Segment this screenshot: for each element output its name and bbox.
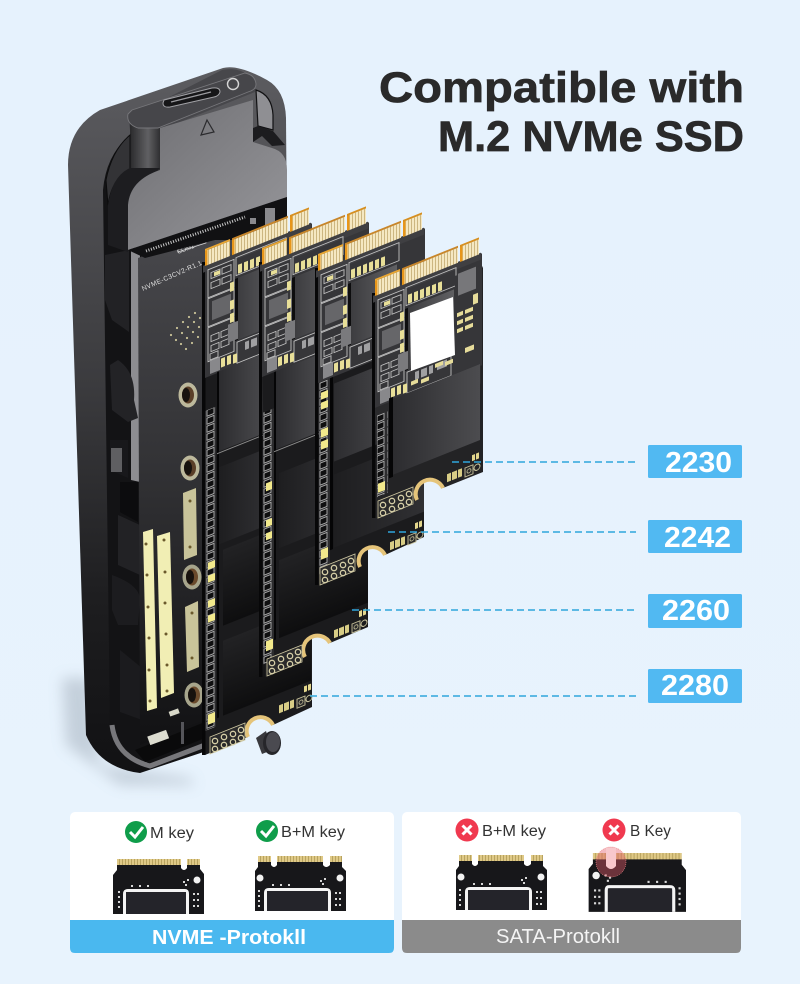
- title: Compatible with: [379, 64, 744, 112]
- M key label: M key: [150, 825, 194, 842]
- B key SSD thumbnail: [589, 853, 686, 912]
- mounting holes: [178, 382, 204, 708]
- SSD 2230 card: [372, 236, 483, 518]
- icon: green check M key: [125, 821, 147, 843]
- board markings: NVME-C3CV2-R1.1: [141, 260, 203, 293]
- top surface of cap: [128, 69, 255, 130]
- size label 2242: [648, 520, 742, 554]
- B+M key label: B+M key: [482, 823, 546, 840]
- label line 2230: [452, 461, 637, 463]
- inner recess: [103, 135, 215, 760]
- cap neck: [130, 122, 160, 174]
- side latch blocks: [105, 250, 146, 720]
- B+M key SSD thumbnail: [456, 855, 547, 910]
- SSD 2260 card: [259, 205, 369, 677]
- SSD 2242 card: [315, 211, 425, 585]
- label line 2260: [352, 609, 636, 611]
- cap pill rim: [128, 73, 256, 128]
- title: M.2 NVMe SSD: [438, 113, 744, 161]
- yellow dot cluster: [170, 312, 201, 350]
- screw: [256, 731, 281, 755]
- size label 2260: 2260: [662, 595, 730, 627]
- size label 2242: 2242: [664, 522, 731, 554]
- label line 2280: [310, 695, 636, 697]
- B+M key label: B+M key: [281, 824, 345, 841]
- size label 2280: [648, 669, 742, 703]
- cap arch: [106, 135, 130, 205]
- icon: red cross B+M key: [456, 818, 478, 842]
- SATA banner text: SATA-Protokll: [496, 926, 620, 948]
- rim highlight: [112, 725, 205, 766]
- triangle mark: [201, 120, 214, 135]
- size label 2260: [648, 594, 742, 628]
- gold contact pads: [143, 488, 199, 711]
- USB-C port: [163, 88, 220, 107]
- enclosure shadow: [62, 678, 195, 785]
- cap right tab: [253, 90, 285, 146]
- board bottom parts: [135, 708, 205, 762]
- board markings: [141, 233, 206, 293]
- panel: SATA protocol: [402, 812, 741, 953]
- cap logo: [228, 78, 238, 90]
- panel: NVMe protocol: [70, 812, 394, 953]
- pink highlight on B key notch: [596, 847, 626, 877]
- size label 2280: 2280: [661, 670, 729, 702]
- board markings: COM1: [176, 243, 196, 256]
- circuit board: [138, 228, 215, 745]
- B+M key SSD thumbnail: [255, 856, 346, 911]
- size label 2230: [648, 445, 742, 479]
- SATA banner: [402, 920, 741, 953]
- label line 2242: [388, 531, 636, 533]
- icon: red cross B key: [602, 818, 626, 842]
- cap grey face: [128, 100, 287, 250]
- enclosure with open cap and circuit board: [68, 67, 287, 773]
- black latch arch: [108, 168, 160, 252]
- NVMe banner text: NVME -Protokll: [152, 927, 306, 949]
- SSD 2280 card: [202, 206, 313, 755]
- NVMe banner: [70, 920, 394, 953]
- B Key label: B Key: [630, 823, 671, 840]
- white sticker: [410, 297, 455, 371]
- enclosure outer shell: [68, 67, 287, 773]
- icon: green check B+M key: [256, 820, 278, 842]
- title: [379, 64, 744, 161]
- connector slot: [128, 197, 287, 258]
- M key SSD thumbnail: [113, 859, 204, 914]
- size label 2230: 2230: [665, 447, 732, 479]
